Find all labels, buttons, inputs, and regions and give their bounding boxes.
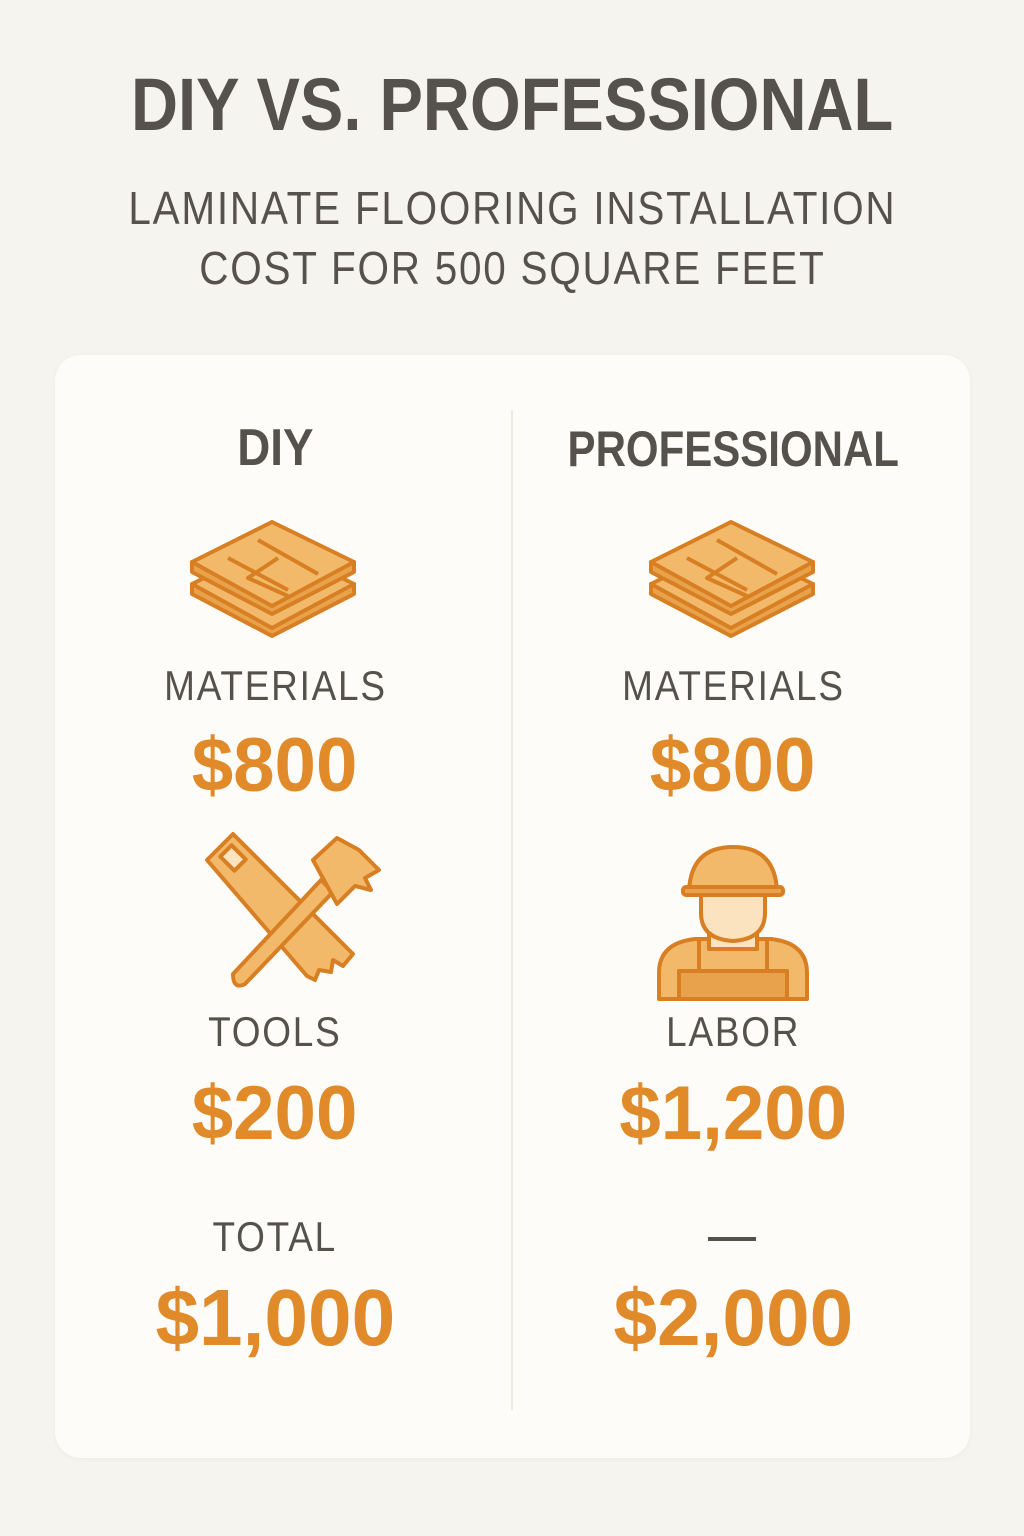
title: DIY VS. PROFESSIONAL [131, 63, 893, 146]
dash [708, 1237, 756, 1241]
heading: DIY: DIY [237, 419, 313, 477]
label: materials: MATERIALS [622, 662, 844, 709]
value: $200: $200 [192, 1071, 358, 1156]
column: professional [567, 421, 899, 1362]
subtitle: COST FOR 500 SQUARE FEET [199, 242, 825, 294]
label: total: TOTAL [213, 1213, 337, 1260]
heading: professional: PROFESSIONAL [567, 421, 899, 477]
icon: planks [190, 520, 356, 638]
panel: comparison card [55, 355, 970, 1458]
icon: saw and hammer [204, 832, 382, 988]
subtitle: LAMINATE FLOORING INSTALLATION [128, 182, 896, 234]
label: labor: LABOR [666, 1008, 800, 1055]
label: tools: TOOLS [208, 1008, 342, 1055]
value: $800: $800 [192, 723, 358, 808]
icon: worker [657, 845, 809, 1001]
value: $800: $800 [650, 723, 816, 808]
label: materials: MATERIALS [164, 662, 386, 709]
value: $1,000: $1,000 [155, 1273, 395, 1362]
value: $1,200: $1,200 [619, 1071, 847, 1156]
column: DIY [155, 419, 395, 1362]
value: $2,000: $2,000 [613, 1273, 853, 1362]
subtitle [128, 182, 896, 294]
icon: planks [648, 520, 816, 638]
